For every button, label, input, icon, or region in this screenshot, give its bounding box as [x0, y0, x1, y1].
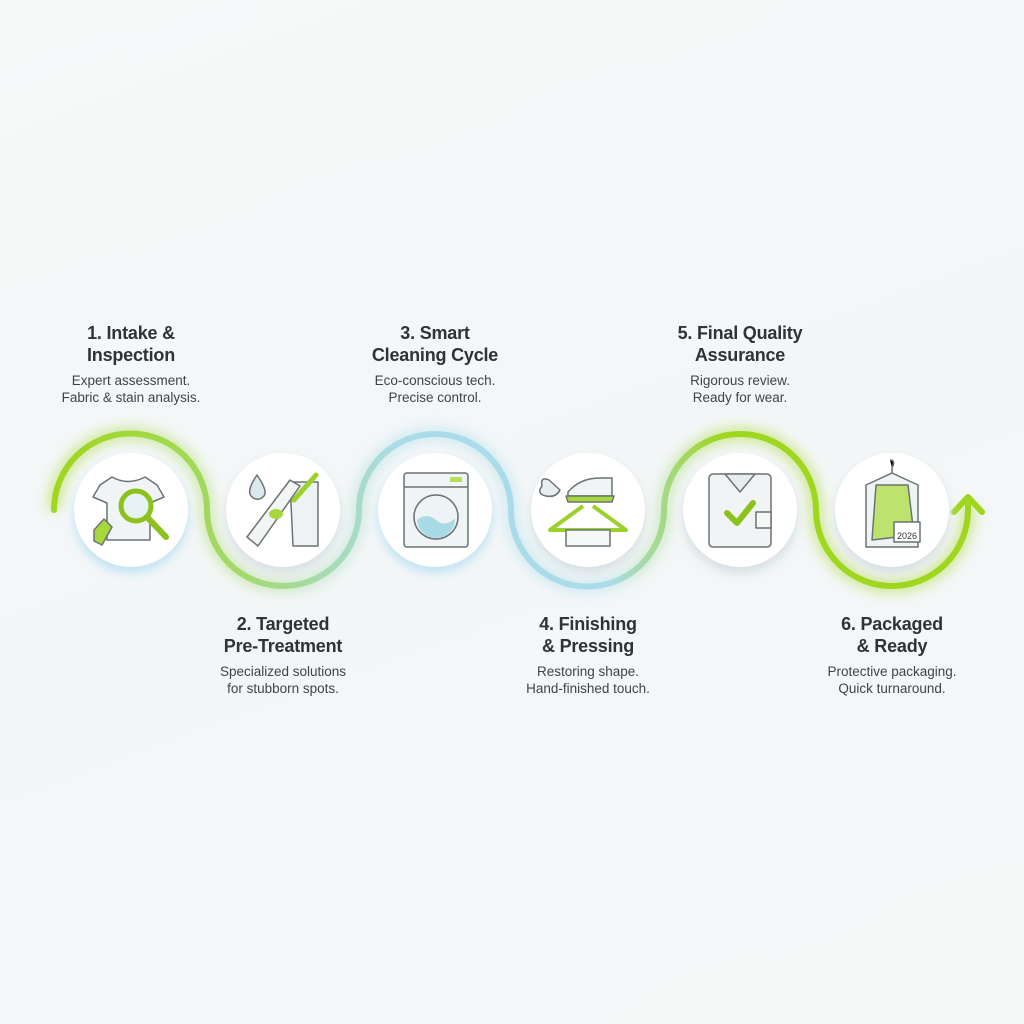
- step 5 text: 5. Final Quality: [678, 323, 802, 343]
- step 1 text: Expert assessment.: [72, 373, 190, 388]
- step 2 text: for stubborn spots.: [227, 681, 339, 696]
- step 6 text: Quick turnaround.: [838, 681, 946, 696]
- step 4 text: Restoring shape.: [537, 664, 639, 679]
- step 5 text: [678, 323, 802, 405]
- step 3 text: Precise control.: [388, 390, 482, 405]
- step 6 text: & Ready: [857, 636, 927, 656]
- step 1 text: Fabric & stain analysis.: [62, 390, 200, 405]
- step 4 text: Hand-finished touch.: [526, 681, 650, 696]
- step 5 text: Rigorous review.: [690, 373, 790, 388]
- icon: drop and brush: [247, 475, 318, 546]
- step 5 text: Assurance: [695, 345, 785, 365]
- step circles: [74, 453, 949, 573]
- icon: shirt with magnifier: [93, 477, 166, 545]
- wave path: [54, 434, 968, 586]
- arrow head: [954, 497, 982, 512]
- step 4 text: 4. Finishing: [539, 614, 637, 634]
- step 3 text: [372, 323, 498, 405]
- step 2 text: [220, 614, 346, 696]
- icon: iron and hanger: [540, 478, 626, 546]
- icon: packaged garment: [866, 460, 920, 547]
- icon: shirt with check: [709, 474, 771, 547]
- step 3 text: 3. Smart: [400, 323, 470, 343]
- step 1 text: 1. Intake &: [87, 323, 175, 343]
- step 2 text: 2. Targeted: [237, 614, 329, 634]
- step 2 text: Specialized solutions: [220, 664, 346, 679]
- step 1 text: [62, 323, 200, 405]
- step 3 text: Eco-conscious tech.: [375, 373, 495, 388]
- icon: packaged garment: 2026: [897, 531, 917, 541]
- icon: washing machine: [404, 473, 468, 547]
- step 5 text: Ready for wear.: [693, 390, 787, 405]
- step 1 text: Inspection: [87, 345, 175, 365]
- step 6 text: Protective packaging.: [827, 664, 957, 679]
- step 6 text: 6. Packaged: [841, 614, 943, 634]
- step 4 text: & Pressing: [542, 636, 634, 656]
- step 4 text: [526, 614, 650, 696]
- step 3 text: Cleaning Cycle: [372, 345, 498, 365]
- step 6 text: [827, 614, 957, 696]
- step 2 text: Pre-Treatment: [224, 636, 342, 656]
